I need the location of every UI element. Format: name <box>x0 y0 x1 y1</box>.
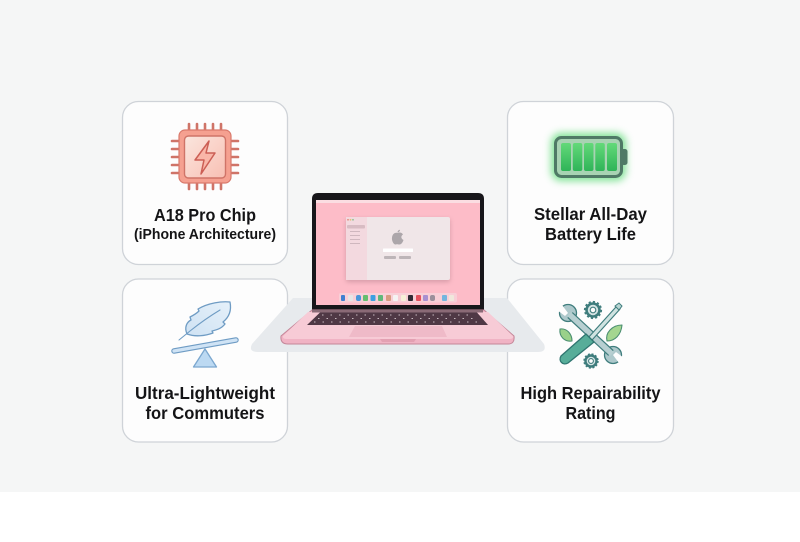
laptop base <box>281 310 514 344</box>
keyboard <box>307 312 488 325</box>
text: for Commuters: for Commuters <box>146 403 265 423</box>
panel: battery <box>508 102 674 264</box>
icon: right leaf <box>607 325 622 341</box>
icon: chip <box>172 124 238 189</box>
heading: Stellar All-Day: Stellar All-Day <box>534 204 647 224</box>
laptop lid bezel <box>312 193 484 312</box>
icon: wrench <box>553 301 628 367</box>
text: Rating: Rating <box>566 403 616 423</box>
dock <box>339 293 457 302</box>
icon: tools and leaves <box>553 301 628 368</box>
menu bar <box>316 200 480 203</box>
icon: apple logo <box>392 230 404 244</box>
trackpad <box>349 326 447 337</box>
icon: feather on balance <box>174 302 236 367</box>
laptop screen <box>316 200 480 305</box>
front notch <box>380 339 416 342</box>
panel: repairability <box>508 279 674 442</box>
app window <box>346 217 450 282</box>
heading: A18 Pro Chip: A18 Pro Chip <box>154 205 256 225</box>
icon: left leaf <box>560 329 572 341</box>
heading: Ultra-Lightweight: Ultra-Lightweight <box>135 383 275 403</box>
icon: gear bottom <box>584 354 598 368</box>
laptop illustration <box>281 193 514 344</box>
panel: A18 Pro chip <box>122 102 288 264</box>
icon: gear top <box>585 302 601 318</box>
text: Battery Life: Battery Life <box>545 224 636 244</box>
text: iPhone Architecture: (iPhone Architecture) <box>134 226 276 243</box>
icon: battery <box>551 133 628 181</box>
heading: High Repairability: High Repairability <box>520 383 661 403</box>
icon: screwdriver <box>560 303 622 364</box>
panel: ultra-lightweight <box>122 279 288 442</box>
platform shadow under laptop <box>251 298 545 352</box>
